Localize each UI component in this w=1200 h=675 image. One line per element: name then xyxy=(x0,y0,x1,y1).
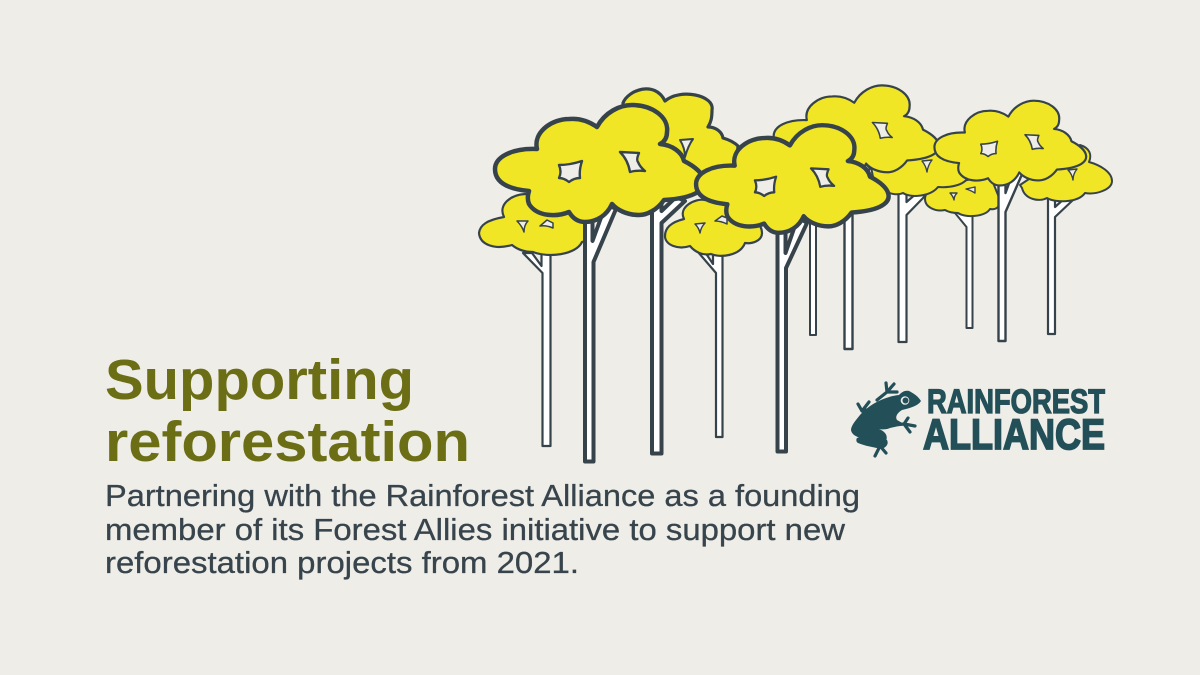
tree: small back crown at 969 xyxy=(925,175,1000,328)
tree: back right crown at 1051 xyxy=(1020,145,1112,334)
tree: tall crown at 656 xyxy=(623,89,738,454)
logo: Rainforest Alliance xyxy=(851,383,1105,459)
tree: large front crown at 589 xyxy=(495,105,704,462)
heading: Supporting xyxy=(105,348,414,412)
tree: large front crown at 781 xyxy=(696,125,889,452)
heading xyxy=(105,348,470,474)
body text: reforestation projects from 2021. xyxy=(105,545,579,580)
logo wordmark: ALLIANCE xyxy=(923,411,1105,459)
heading: reforestation xyxy=(105,410,470,474)
tree: crown at 848 xyxy=(774,85,939,349)
tree: back crown at 902 xyxy=(868,145,968,342)
tree: small mid tree at 718 xyxy=(665,200,762,437)
logo wordmark: RAINFOREST xyxy=(927,383,1105,421)
body text xyxy=(105,478,860,580)
body text: member of its Forest Allies initiative to support new xyxy=(105,512,846,547)
logo wordmark xyxy=(923,383,1105,459)
body text: Partnering with the Rainforest Alliance as a founding xyxy=(105,478,860,513)
tree: crown at 1002 xyxy=(934,101,1086,341)
tree: far back thin trunk xyxy=(810,215,816,335)
icon: frog xyxy=(851,383,921,456)
illustration: forest of yellow trees xyxy=(479,85,1112,462)
tree: small left tree at 546 xyxy=(479,194,591,446)
